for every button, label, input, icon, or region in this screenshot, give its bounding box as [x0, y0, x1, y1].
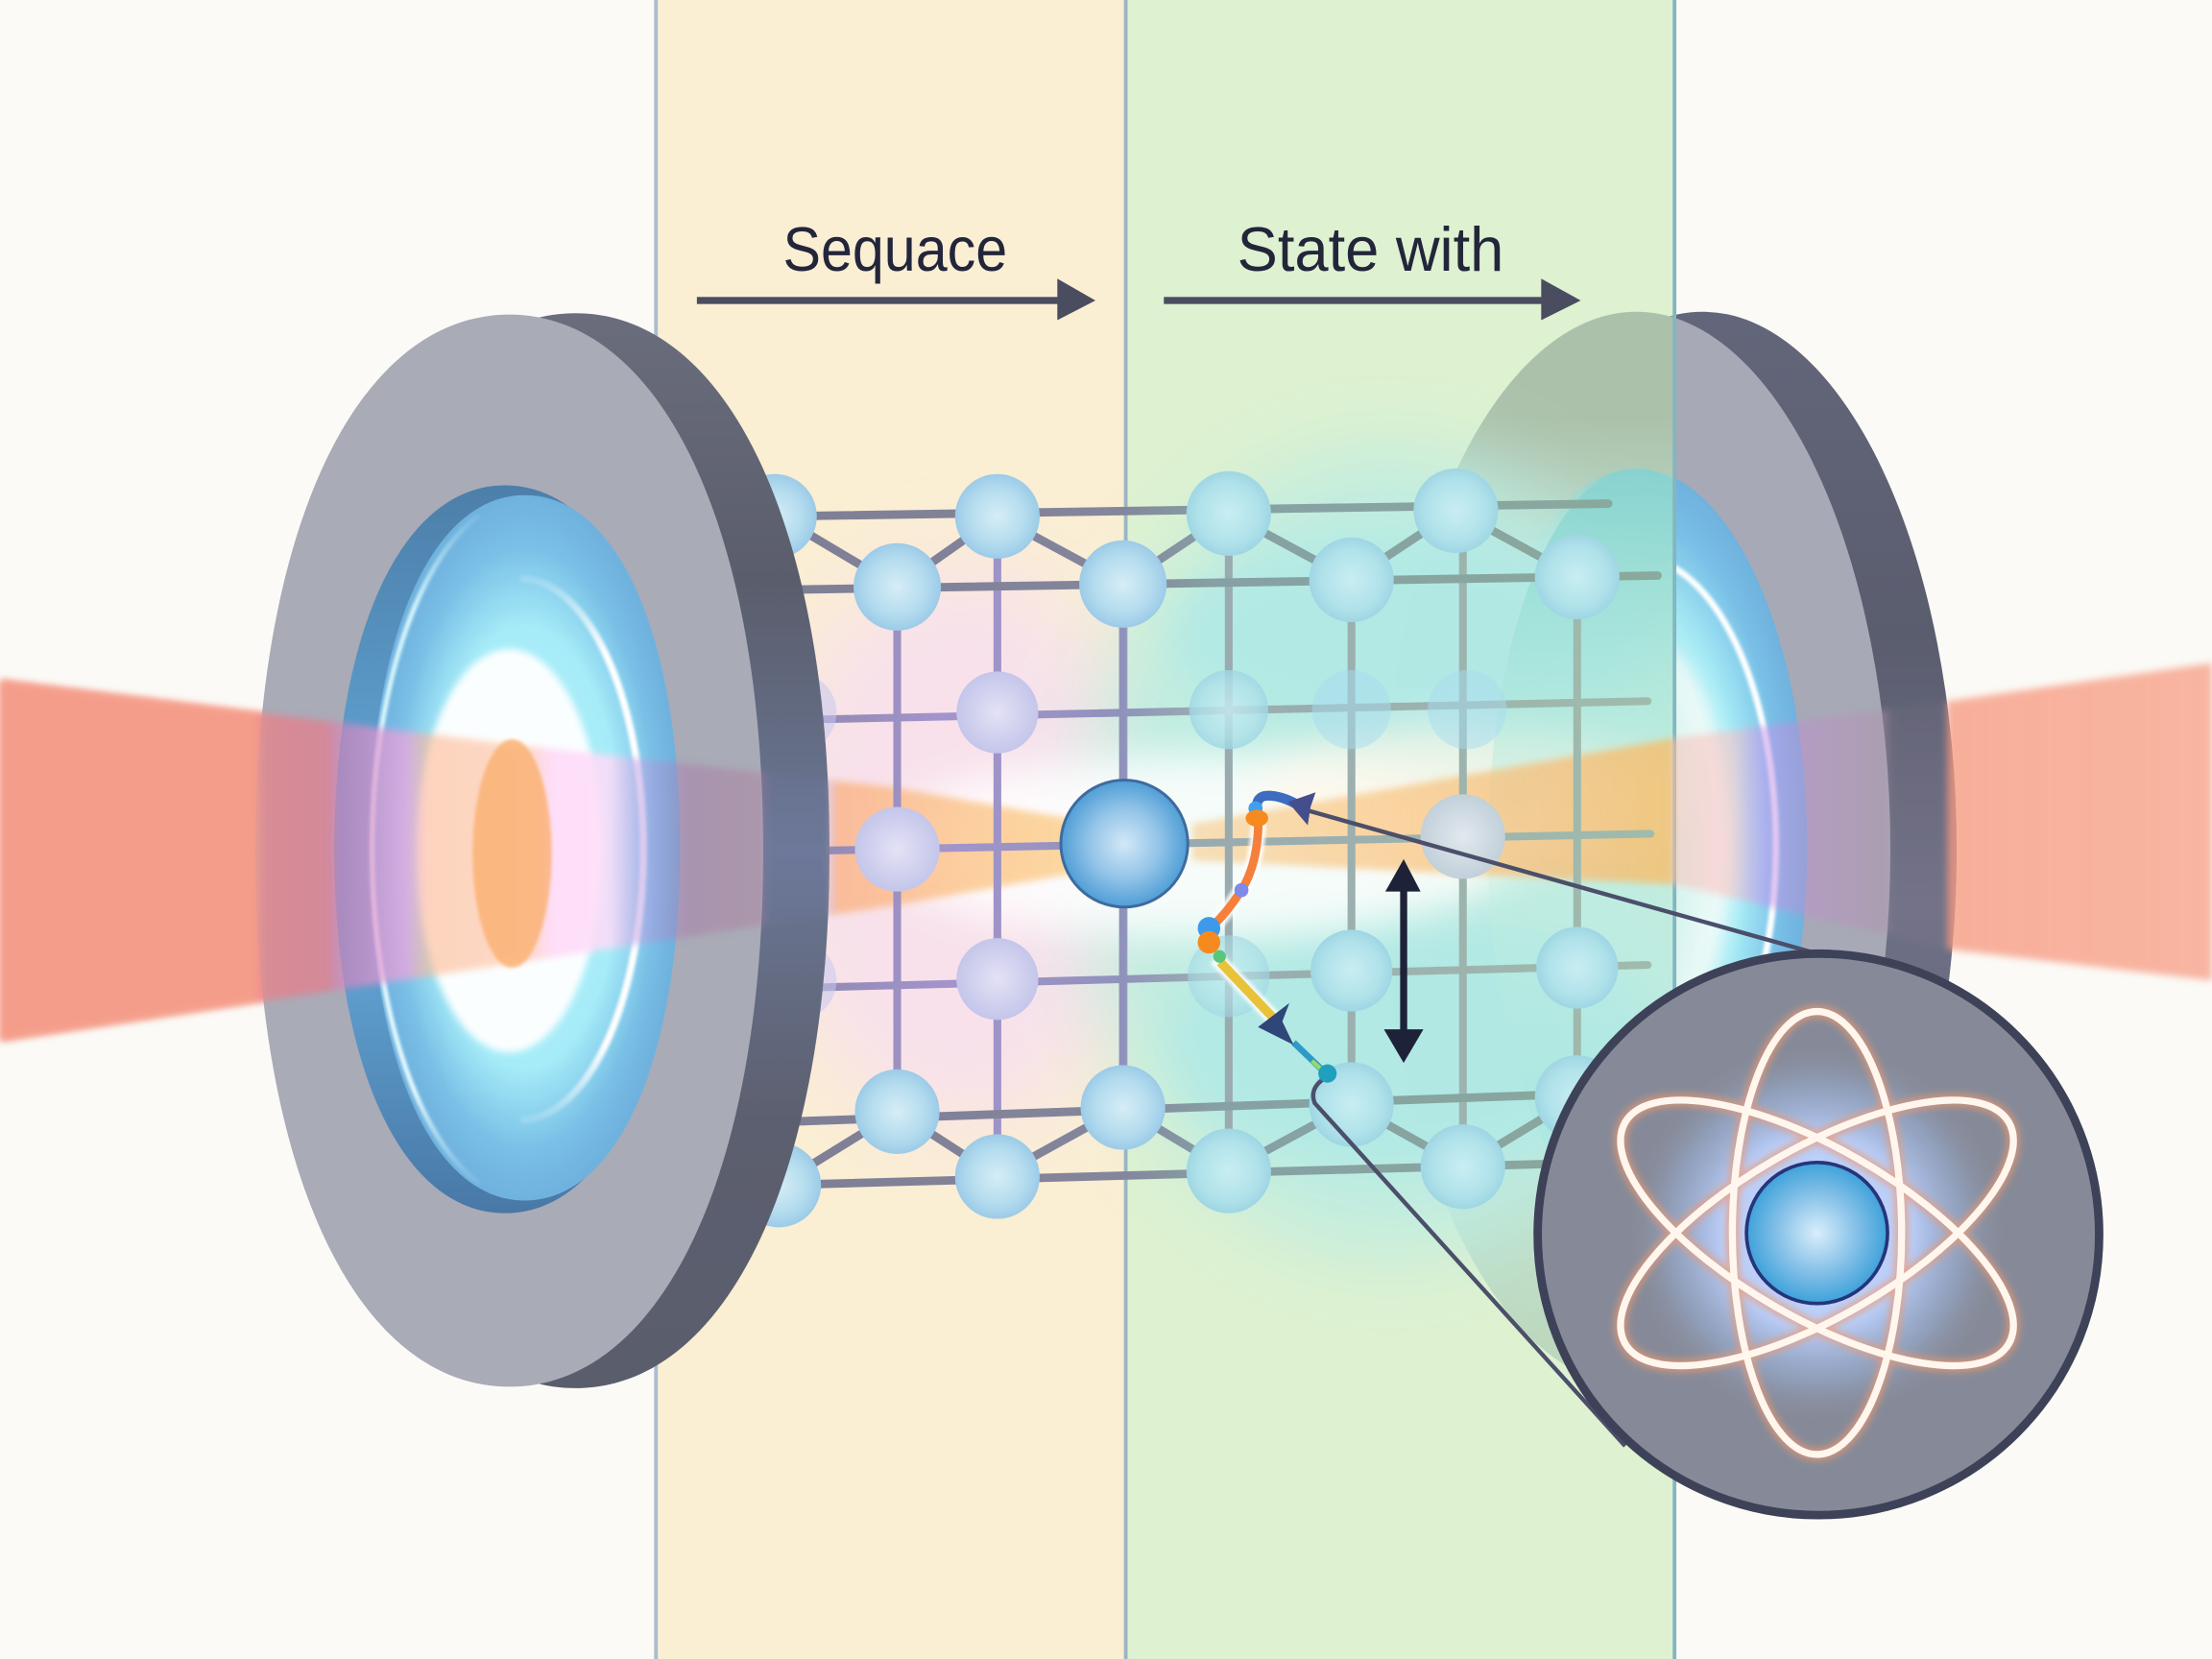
back bottom row nodes — [736, 1124, 1505, 1227]
right cavity mirror — [1382, 312, 1957, 1386]
orbit glow — [1583, 1012, 2051, 1455]
panel: sequence band — [656, 0, 1126, 1659]
orange beam focus ellipse — [472, 739, 552, 968]
front bottom row nodes — [854, 1055, 1620, 1154]
left laser beam inside lattice — [0, 680, 1115, 1041]
arrowhead: upper transition — [1288, 792, 1315, 826]
left cavity mirror — [255, 313, 830, 1388]
front top row nodes — [854, 535, 1620, 631]
nucleus — [1746, 1163, 1887, 1304]
arrow: state — [1164, 278, 1580, 321]
faded mid rows nodes — [757, 670, 1618, 1020]
nucleus glow — [1626, 1043, 2008, 1424]
double-headed arrow — [1383, 859, 1424, 1063]
callout leader lines — [1305, 809, 1897, 1446]
transition path down — [1214, 950, 1336, 1083]
central target atom — [1061, 781, 1188, 907]
atom orbits — [1583, 1012, 2051, 1455]
heading: Sequace: Sequace — [783, 214, 1007, 284]
panel: state band — [1126, 0, 1674, 1659]
arrow: sequence — [697, 278, 1095, 321]
right laser beam — [1192, 663, 2212, 980]
mirror face fading into the lattice — [1448, 454, 1672, 1365]
back top row nodes — [733, 469, 1498, 559]
left laser beam over mirror — [0, 676, 830, 1045]
arrowhead: lower transition — [1258, 1003, 1293, 1045]
callout: atom magnifier — [1538, 953, 2099, 1515]
lattice background glow — [769, 451, 1693, 1256]
atom lattice — [733, 469, 1658, 1227]
mirror aperture seen through the band — [1489, 469, 1672, 886]
vertical band dividers — [656, 0, 1674, 1659]
heading: State with: State with — [1238, 214, 1503, 284]
transition path up — [1198, 796, 1296, 953]
